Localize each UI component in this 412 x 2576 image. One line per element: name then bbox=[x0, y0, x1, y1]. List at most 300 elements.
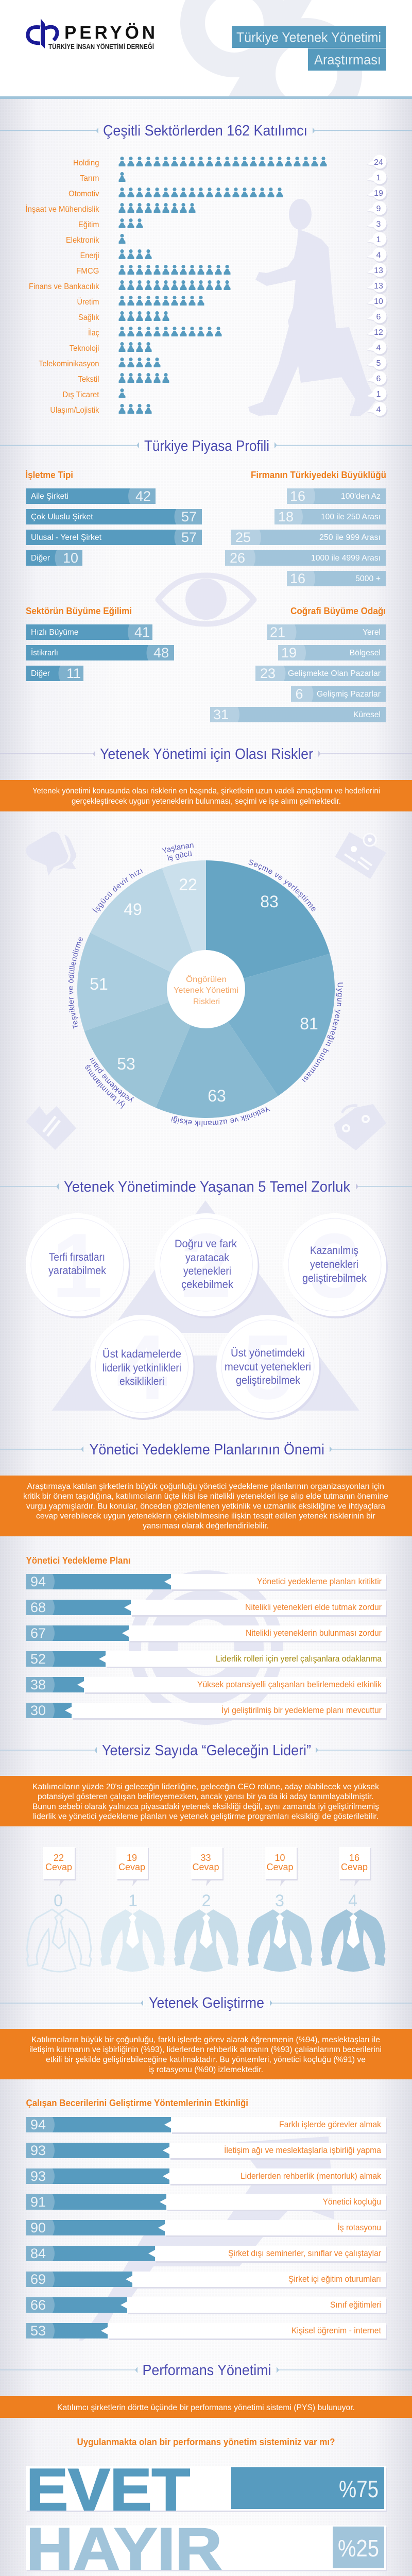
bar: 84: Şirket dışı seminerler, sınıflar ve çalıştaylar bbox=[228, 2248, 381, 2258]
bar: Yerel: Yerel bbox=[363, 628, 381, 637]
heading: succession plan: Yönetici Yedekleme Planı bbox=[26, 1555, 131, 1566]
row: Ulaşım/Lojistik: Ulaşım/Lojistik bbox=[50, 406, 99, 415]
bar: 5000 + bbox=[287, 571, 386, 586]
panel: HAYIR 25 bbox=[26, 2516, 387, 2576]
pie centre label: Öngörülen bbox=[186, 975, 227, 984]
row: FMCG: 13 bbox=[374, 266, 383, 275]
bar: Küresel bbox=[210, 707, 386, 722]
section heading: succession plans: Yönetici Yedekleme Planlarının Önemi bbox=[90, 1442, 324, 1458]
icon: speech bubbles bbox=[26, 832, 76, 876]
row: Tekstil: 6 bbox=[376, 375, 381, 383]
panel: EVET 75: %75 bbox=[339, 2476, 379, 2502]
pie centre label: Riskleri bbox=[193, 997, 220, 1006]
bar: Yerel bbox=[267, 624, 386, 640]
bar: 68 bbox=[26, 1600, 387, 1617]
row: Holding: Holding bbox=[73, 159, 99, 167]
bar: 93: 93 bbox=[30, 2168, 46, 2184]
pie curved labels: Teşvikler ve ödüllendirme bbox=[68, 938, 83, 1029]
challenge circle 5: geliştirebilmek bbox=[236, 1375, 300, 1386]
callout: talent development intro: etkili bir şekilde geliştirebileceğine katılmaktadır. Bu yöntemleri, yönetici koçluğu (%91) ve bbox=[46, 2056, 366, 2064]
bar: Aile Şirketi bbox=[26, 488, 156, 504]
callout: succession intro: vurgu yapmışlardır. Bu konular, önceden gözlemlenen yetkinlik ve uzmanlık eksikliğine ve ihtiyaçlara bbox=[26, 1502, 385, 1511]
callout: risks intro bbox=[0, 780, 412, 811]
bar: 90: İş rotasyonu bbox=[338, 2223, 381, 2232]
callout: future leaders intro: Katılımcıların yüzde 20'si geleceğin liderliğine, geleceğin CEO rolüne, aday olabilecek ve yüksek bbox=[32, 1783, 379, 1791]
callout: succession intro: yansıması olarak değerlendirilebilir. bbox=[143, 1522, 269, 1531]
shirt 4 bbox=[321, 1891, 385, 1972]
bar: 5000 +: 16 bbox=[290, 571, 305, 586]
bar: 52: Liderlik rolleri için yerel çalışanlara odaklanma bbox=[216, 1654, 382, 1664]
pie curved labels: iş gücü bbox=[167, 851, 192, 861]
panel: sector growth trend bbox=[26, 606, 174, 681]
row: Finans ve Bankacılık: 13 bbox=[374, 282, 383, 291]
callout: 33 Cevap: Cevap bbox=[192, 1862, 219, 1872]
challenge circle 4: 4 bbox=[116, 1316, 167, 1418]
row: Dış Ticaret: 1 bbox=[376, 390, 381, 399]
challenge circle 1 bbox=[26, 1213, 130, 1318]
callout: 33 Cevap: 33 bbox=[200, 1853, 211, 1863]
section heading: future leaders: Yetersiz Sayıda “Geleceğin Lideri” bbox=[102, 1742, 311, 1759]
title bbox=[232, 26, 386, 71]
bar: 53: 53 bbox=[30, 2323, 46, 2338]
silhouette: walking person bbox=[248, 199, 376, 416]
shirt 4: 4 bbox=[348, 1891, 357, 1910]
pie values: 53 bbox=[117, 1055, 135, 1073]
bar: Aile Şirketi: Aile Şirketi bbox=[31, 492, 68, 501]
challenge circle 1: 1 bbox=[52, 1214, 103, 1317]
challenge circle 2: yetenekleri bbox=[183, 1265, 231, 1277]
bar: 93: İletişim ağı ve meslektaşlarla işbirliği yapma bbox=[224, 2145, 381, 2155]
callout: performance intro: Katılımcı şirketlerin dörtte üçünde bir performans yönetimi sistemi (PYS) bulunuyor. bbox=[57, 2403, 355, 2412]
bar: 250 ile 999: 250 ile 999 Arası bbox=[319, 533, 381, 542]
callout: risks intro: gerçekleştirecek uygun yeteneklerin bulunması, seçimi ve işe alımı gelmektedir. bbox=[72, 797, 341, 806]
callout: succession intro: cevap verebilecek uygun yeteneklerin çekilebilmesine ilişkin tespit edilen yetenek risklerinin bir bbox=[36, 1512, 375, 1520]
pie curved labels: Uygun yeteneğin bulunması bbox=[302, 982, 343, 1082]
challenge circle 5 bbox=[216, 1315, 321, 1420]
bar: 5000 +: 5000 + bbox=[355, 574, 381, 583]
row: Elektronik: Elektronik bbox=[66, 236, 99, 245]
bar: Hızlı Büyüme bbox=[26, 624, 152, 640]
bar: 30: 30 bbox=[30, 1703, 46, 1718]
callout: 10 Cevap: 10 bbox=[274, 1853, 285, 1863]
bar: Hızlı Büyüme: Hızlı Büyüme bbox=[31, 628, 79, 637]
challenge circle 4 bbox=[91, 1315, 195, 1420]
logo: PERYÖN: TÜRKİYE İNSAN YÖNETİMİ DERNEĞİ bbox=[48, 42, 154, 50]
section heading: risks bbox=[0, 746, 412, 762]
callout: 19 Cevap: 19 bbox=[127, 1853, 137, 1863]
bar: Diğer: 10 bbox=[63, 550, 78, 566]
callout: future leaders intro: Bunun sebebi olarak yalnızca piyasadaki yetenek eksikliği değil, aynı zamanda iyi geliştirilmemiş bbox=[32, 1802, 379, 1811]
row: Enerji: 4 bbox=[376, 251, 381, 260]
callout: 19 Cevap: Cevap bbox=[118, 1862, 145, 1872]
bar: Yerel: 21 bbox=[270, 624, 285, 640]
bar: Bölgesel: 19 bbox=[281, 645, 297, 660]
bar: 1000 ile 4999: 26 bbox=[230, 550, 245, 566]
bar: Küresel: Küresel bbox=[353, 710, 381, 719]
bar: 38: Yüksek potansiyelli çalışanları belirlemedeki etkinlik bbox=[197, 1680, 382, 1689]
panel: company size bbox=[225, 470, 386, 586]
row: İlaç: 12 bbox=[374, 328, 383, 337]
callout: risks intro: Yetenek yönetimi konusunda olası risklerin en başında, şirketlerin uzun vadeli amaçlarını ve hedeflerini bbox=[32, 787, 380, 795]
callout: 10 Cevap bbox=[265, 1847, 298, 1886]
bar: 84: 84 bbox=[30, 2246, 46, 2261]
bar: 93: Liderlerden rehberlik (mentorluk) almak bbox=[241, 2171, 381, 2181]
callout: talent development intro: iletişim kurmanın ve işbirliğinin (%93), liderlerden rehberlik almanın (%93) çalıianlarının becerilerini bbox=[29, 2045, 382, 2054]
pie curved labels: Yetkinlik ve uzmanlık eksiği bbox=[171, 1107, 270, 1127]
challenge circle 3 bbox=[283, 1213, 388, 1318]
bar: 100'den Az: 100'den Az bbox=[341, 492, 381, 501]
gear watermark bbox=[129, 1570, 283, 1725]
shirt 3: 3 bbox=[275, 1891, 284, 1910]
bar: Çok Uluslu Şirket bbox=[26, 509, 202, 524]
pie values: 83 bbox=[260, 892, 279, 911]
header bbox=[26, 0, 386, 96]
row: Finans ve Bankacılık: Finans ve Bankacılık bbox=[29, 282, 99, 291]
section heading: participants: Çeşitli Sektörlerden 162 Katılımcı bbox=[103, 123, 307, 139]
bar: 100 ile 250 bbox=[274, 509, 386, 524]
row: Eğitim bbox=[78, 216, 387, 232]
bar: 93 bbox=[26, 2168, 387, 2185]
challenge circle 4: liderlik yetkinlikleri bbox=[102, 1362, 181, 1374]
bar: Diğer bbox=[26, 550, 82, 566]
row: Otomotiv: 19 bbox=[374, 189, 383, 198]
callout: future leaders intro bbox=[0, 1776, 412, 1826]
pictogram chart: sectors bbox=[26, 155, 387, 417]
callout: 10 Cevap: Cevap bbox=[266, 1862, 294, 1872]
title: Türkiye Yetenek Yönetimi bbox=[236, 30, 381, 45]
section heading: participants bbox=[0, 123, 412, 139]
section heading: succession plans bbox=[0, 1442, 412, 1458]
bar: 66: Sınıf eğitimleri bbox=[330, 2300, 381, 2310]
bar: 90: 90 bbox=[30, 2220, 46, 2235]
header watermark: percent sign bbox=[180, 0, 362, 96]
section heading: future leaders bbox=[0, 1742, 412, 1759]
row: İlaç bbox=[88, 325, 387, 340]
panel: HAYIR 25: %25 bbox=[338, 2535, 379, 2562]
shirt 2: 2 bbox=[202, 1891, 211, 1910]
bar: Gelişmekte Olan Pazarlar: 23 bbox=[260, 666, 276, 681]
row: Sağlık: 6 bbox=[376, 313, 381, 321]
row: Sağlık: Sağlık bbox=[78, 313, 99, 322]
logo: PERYÖN: PERYÖN bbox=[64, 23, 155, 43]
pie values: 22 bbox=[179, 875, 197, 894]
bar: Aile Şirketi: 42 bbox=[135, 488, 151, 504]
row: Finans ve Bankacılık bbox=[29, 278, 387, 294]
shirt 1 bbox=[100, 1891, 165, 1972]
bar: Hızlı Büyüme: 41 bbox=[134, 624, 150, 640]
row: Ulaşım/Lojistik bbox=[50, 402, 387, 417]
heading: Sektörün Büyüme Eğilimi bbox=[26, 606, 132, 616]
bar: 38 bbox=[26, 1677, 387, 1694]
bar: Ulusal - Yerel Şirket: Ulusal - Yerel Şirket bbox=[31, 533, 102, 542]
challenge circle 3: 3 bbox=[309, 1214, 360, 1317]
callout: talent development intro: Katılımcıların büyük bir çoğunluğu, farklı işlerde görev alarak öğrenmenin (%94), meslektaşları ile bbox=[31, 2036, 380, 2044]
row: Holding: 24 bbox=[374, 158, 383, 167]
challenge circle 2: 2 bbox=[181, 1214, 232, 1317]
question heading: Uygulanmakta olan bir performans yönetim sisteminiz var mı? bbox=[77, 2437, 335, 2447]
bar: 38: 38 bbox=[30, 1677, 46, 1692]
bar: 68: 68 bbox=[30, 1600, 46, 1615]
row: Teknoloji: 4 bbox=[376, 344, 381, 352]
pie curved labels: yedekleme planı bbox=[90, 1057, 134, 1103]
bar: 69: Şirket içi eğitim oturumları bbox=[288, 2274, 381, 2284]
callout: 19 Cevap bbox=[116, 1847, 149, 1886]
title: Araştırması bbox=[314, 52, 381, 67]
bar: Gelişmekte Olan Pazarlar: Gelişmekte Olan Pazarlar bbox=[288, 669, 381, 678]
shirt 2 bbox=[174, 1891, 238, 1972]
bar: 66 bbox=[26, 2297, 387, 2314]
pie curved labels: İşgücü devir hızı bbox=[92, 869, 143, 913]
heading: İşletme Tipi bbox=[26, 470, 73, 480]
heading: Coğrafi Büyüme Odağı bbox=[290, 606, 386, 616]
heading: development methods: Çalışan Becerilerini Geliştirme Yöntemlerinin Etkinliği bbox=[26, 2098, 248, 2108]
slice: 49 bbox=[90, 868, 206, 989]
row: Tarım: 1 bbox=[376, 174, 381, 182]
row: Telekominikasyon bbox=[39, 355, 387, 371]
bar: Ulusal - Yerel Şirket: 57 bbox=[181, 530, 197, 545]
bar: Çok Uluslu Şirket: Çok Uluslu Şirket bbox=[31, 513, 93, 521]
row: Ulaşım/Lojistik: 4 bbox=[376, 405, 381, 414]
row: Telekominikasyon: Telekominikasyon bbox=[39, 360, 99, 368]
callout: 16 Cevap: 16 bbox=[349, 1853, 359, 1863]
bar: Bölgesel bbox=[278, 645, 386, 660]
row: Otomotiv bbox=[68, 185, 387, 201]
row: Tekstil bbox=[78, 371, 387, 386]
bar: Gelişmekte Olan Pazarlar bbox=[255, 666, 386, 681]
bar: İstikrarlı bbox=[26, 645, 174, 660]
row: İnşaat ve Mühendislik: İnşaat ve Mühendislik bbox=[26, 204, 99, 214]
slice: 83 bbox=[206, 860, 330, 989]
bar: 53 bbox=[26, 2323, 387, 2340]
panel: EVET 75 bbox=[26, 2457, 387, 2523]
panel: business type bbox=[26, 470, 202, 566]
slice: 51 bbox=[77, 933, 206, 1031]
challenge circle 2: Doğru ve fark bbox=[175, 1238, 237, 1250]
section heading: performance management: Performans Yönetimi bbox=[142, 2362, 271, 2379]
pyramid watermark bbox=[52, 1200, 359, 1411]
pie curved labels: Yaşlanan bbox=[162, 843, 194, 853]
bar: 94: Yönetici yedekleme planları kritiktir bbox=[257, 1577, 382, 1586]
bar: 1000 ile 4999 bbox=[225, 550, 386, 566]
row: Elektronik bbox=[66, 232, 387, 247]
row: Tarım bbox=[80, 170, 387, 185]
logo: PERYÖN bbox=[28, 19, 155, 50]
section heading: market profile: Türkiye Piyasa Profili bbox=[144, 438, 269, 454]
section heading: talent development: Yetenek Geliştirme bbox=[149, 1995, 264, 2011]
section heading: five challenges: Yetenek Yönetiminde Yaşanan 5 Temel Zorluk bbox=[64, 1179, 350, 1195]
challenge circle 2: çekebilmek bbox=[181, 1279, 233, 1291]
row: FMCG bbox=[76, 263, 387, 278]
icon: tag bbox=[26, 1106, 76, 1150]
row: FMCG: FMCG bbox=[76, 267, 99, 276]
callout: succession intro: kritik bir önem taşıdığına, katılımcıların üçte ikisi ise nitelikli yetenekleri işe alıp elde tutmanın önemine bbox=[23, 1492, 388, 1501]
pie curved labels: Seçme ve yerleştirme bbox=[248, 859, 315, 911]
ribbon chart: development methods bbox=[26, 2117, 387, 2340]
bar: 30: İyi geliştirilmiş bir yedekleme planı mevcuttur bbox=[221, 1705, 382, 1715]
bar: 250 ile 999 bbox=[231, 530, 386, 545]
bar: 90 bbox=[26, 2220, 387, 2237]
shirt 0: 0 bbox=[54, 1891, 63, 1910]
row: Otomotiv: Otomotiv bbox=[68, 190, 99, 198]
chart: radial risk pie bbox=[68, 843, 343, 1127]
challenge circle 3: yetenekleri bbox=[310, 1259, 358, 1270]
bar: Ulusal - Yerel Şirket bbox=[26, 530, 202, 545]
callout: future leaders intro: liderlik ve yönetici yedekleme planları ve yetenek geliştirme programları eksikliği de gösterilebilir. bbox=[33, 1812, 379, 1821]
bar: Bölgesel: Bölgesel bbox=[350, 649, 381, 657]
section heading: talent development bbox=[0, 1995, 412, 2011]
challenge circle 3: Kazanılmış bbox=[310, 1245, 358, 1257]
bar: 94: 94 bbox=[30, 2117, 46, 2132]
challenge circle 2: yaratacak bbox=[185, 1252, 229, 1264]
challenge circle 4: eksiklikleri bbox=[119, 1376, 164, 1387]
section heading: performance management bbox=[0, 2362, 412, 2379]
row: Dış Ticaret: Dış Ticaret bbox=[62, 391, 99, 399]
row: Holding bbox=[73, 155, 387, 170]
bar: 67: 67 bbox=[30, 1625, 46, 1641]
bar: 67: Nitelikli yeteneklerin bulunması zordur bbox=[246, 1628, 382, 1638]
ribbon chart: succession plan bbox=[26, 1574, 387, 1720]
row: Enerji: Enerji bbox=[80, 251, 99, 260]
bar: Gelişmiş Pazarlar: 6 bbox=[295, 686, 303, 702]
bar: 100'den Az: 16 bbox=[290, 488, 305, 504]
slice: 53 bbox=[84, 989, 206, 1108]
callout: 16 Cevap bbox=[339, 1847, 371, 1886]
challenge circle 1: Terfi fırsatları bbox=[49, 1251, 105, 1263]
pie values: 51 bbox=[90, 975, 108, 993]
row: Teknoloji bbox=[70, 340, 387, 355]
callout: 22 Cevap: Cevap bbox=[45, 1862, 72, 1872]
leaders chart: callouts and shirts bbox=[27, 1847, 385, 1972]
bar: 100 ile 250: 100 ile 250 Arası bbox=[321, 513, 381, 521]
bar: Küresel: 31 bbox=[213, 707, 229, 722]
panel: geographic growth focus bbox=[210, 606, 386, 722]
pie values: 63 bbox=[208, 1087, 226, 1105]
bar: 84 bbox=[26, 2246, 387, 2263]
pie centre label bbox=[167, 950, 245, 1028]
bar: 91 bbox=[26, 2194, 387, 2211]
callout: future leaders intro: potansiyel gösteren çalışan belirleyemezken, ancak yarısı bir ya da iki aday tanımlayabilmiştir. bbox=[38, 1792, 374, 1801]
heading: Firmanın Türkiyedeki Büyüklüğü bbox=[251, 470, 386, 480]
challenge circle 5: mevcut yetenekleri bbox=[225, 1361, 311, 1373]
callout: succession intro bbox=[0, 1476, 412, 1536]
pie centre label: Yetenek Yönetimi bbox=[174, 986, 238, 995]
bar: Gelişmiş Pazarlar: Gelişmiş Pazarlar bbox=[317, 690, 381, 699]
row: Tarım: Tarım bbox=[80, 174, 99, 183]
pie values: 81 bbox=[300, 1014, 318, 1033]
row: İnşaat ve Mühendislik: 9 bbox=[376, 205, 381, 213]
challenge circle 3: geliştirebilmek bbox=[302, 1273, 367, 1284]
pie curved labels: İyi tanımlanmış bbox=[85, 1065, 125, 1109]
challenge circle 5: 5 bbox=[242, 1316, 294, 1418]
row: Teknoloji: Teknoloji bbox=[70, 344, 99, 353]
slice: 81 bbox=[206, 954, 335, 1096]
bar: Gelişmiş Pazarlar bbox=[291, 686, 386, 702]
pie values bbox=[90, 875, 318, 1105]
bar: 30 bbox=[26, 1703, 387, 1720]
callout: talent development intro: iş rotasyonu (%90) izlemektedir. bbox=[148, 2065, 263, 2074]
section heading: risks: Yetenek Yönetimi için Olası Riskler bbox=[100, 746, 313, 762]
icon: eye watermark bbox=[158, 575, 254, 624]
row: Enerji bbox=[80, 247, 388, 263]
callout: 22 Cevap: 22 bbox=[54, 1853, 64, 1863]
bar: 94: Farklı işlerde görevler almak bbox=[279, 2120, 381, 2129]
callout: succession intro: Araştırmaya katılan şirketlerin büyük çoğunluğu yönetici yedekleme planlarının organizasyonları için bbox=[27, 1482, 384, 1491]
row: İnşaat ve Mühendislik bbox=[26, 201, 387, 216]
row: Üretim: Üretim bbox=[77, 297, 99, 307]
callout: 16 Cevap: Cevap bbox=[341, 1862, 368, 1872]
bar: 69: 69 bbox=[30, 2272, 46, 2287]
bar: 91: 91 bbox=[30, 2194, 46, 2210]
row: Telekominikasyon: 5 bbox=[376, 359, 381, 368]
bar: 93 bbox=[26, 2143, 387, 2160]
bar: 100'den Az bbox=[287, 488, 386, 504]
callout: talent development intro bbox=[0, 2029, 412, 2079]
challenge circle 4: Üst kadamelerde bbox=[102, 1348, 181, 1360]
bar: Diğer: 11 bbox=[66, 666, 81, 681]
row: Eğitim: 3 bbox=[376, 220, 381, 229]
bar: 94 bbox=[26, 2117, 387, 2134]
shirt 1: 1 bbox=[128, 1891, 138, 1910]
callout: 22 Cevap bbox=[43, 1847, 76, 1886]
section heading: market profile bbox=[0, 438, 412, 454]
top divider bar bbox=[0, 96, 412, 99]
bar: Diğer: Diğer bbox=[31, 669, 50, 678]
bar: 91: Yönetici koçluğu bbox=[322, 2197, 381, 2207]
arrow watermark bbox=[79, 2137, 334, 2341]
challenge circle 2 bbox=[154, 1213, 260, 1318]
icon: briefcase bbox=[334, 1104, 386, 1150]
bar: 94 bbox=[26, 1574, 387, 1591]
bar: İstikrarlı: 48 bbox=[153, 645, 169, 660]
bar: 93: 93 bbox=[30, 2143, 46, 2158]
panel: EVET 75: EVET bbox=[26, 2457, 190, 2523]
bar: 52 bbox=[26, 1651, 387, 1668]
challenge circle 1: yaratabilmek bbox=[48, 1265, 106, 1277]
row: Tekstil: Tekstil bbox=[78, 375, 99, 384]
icon: id card bbox=[335, 832, 386, 879]
row: Üretim bbox=[77, 294, 387, 309]
challenge circle 5: Üst yönetimdeki bbox=[231, 1347, 305, 1359]
bar: Diğer bbox=[26, 666, 83, 681]
bar: 53: Kişisel öğrenim - internet bbox=[291, 2326, 381, 2335]
bar: İstikrarlı: İstikrarlı bbox=[31, 648, 58, 657]
slice: 22 bbox=[162, 860, 206, 989]
shirt 3 bbox=[248, 1891, 312, 1972]
shirt 0 bbox=[27, 1891, 91, 1972]
bar: 52: 52 bbox=[30, 1651, 46, 1667]
bar: 100 ile 250: 18 bbox=[278, 509, 294, 524]
row: Dış Ticaret bbox=[62, 386, 387, 402]
bar: 68: Nitelikli yetenekleri elde tutmak zordur bbox=[245, 1602, 382, 1612]
pie values: 49 bbox=[124, 900, 142, 919]
bar: Diğer: Diğer bbox=[31, 554, 50, 563]
slice: 63 bbox=[156, 989, 278, 1118]
bar: 69 bbox=[26, 2272, 387, 2289]
row: Üretim: 10 bbox=[374, 297, 383, 306]
bar: 250 ile 999: 25 bbox=[235, 530, 251, 545]
row: Sağlık bbox=[78, 309, 387, 325]
callout: performance intro bbox=[0, 2396, 412, 2418]
bar: 94: 94 bbox=[30, 1574, 46, 1589]
bar: Çok Uluslu Şirket: 57 bbox=[181, 509, 197, 524]
callout: 33 Cevap bbox=[191, 1847, 224, 1886]
row: Elektronik: 1 bbox=[376, 235, 381, 244]
bar: 67 bbox=[26, 1625, 387, 1642]
bar: 1000 ile 4999: 1000 ile 4999 Arası bbox=[311, 554, 381, 563]
bar: 66: 66 bbox=[30, 2297, 46, 2313]
row: Eğitim: Eğitim bbox=[78, 221, 99, 229]
pie curved labels bbox=[68, 843, 343, 1127]
